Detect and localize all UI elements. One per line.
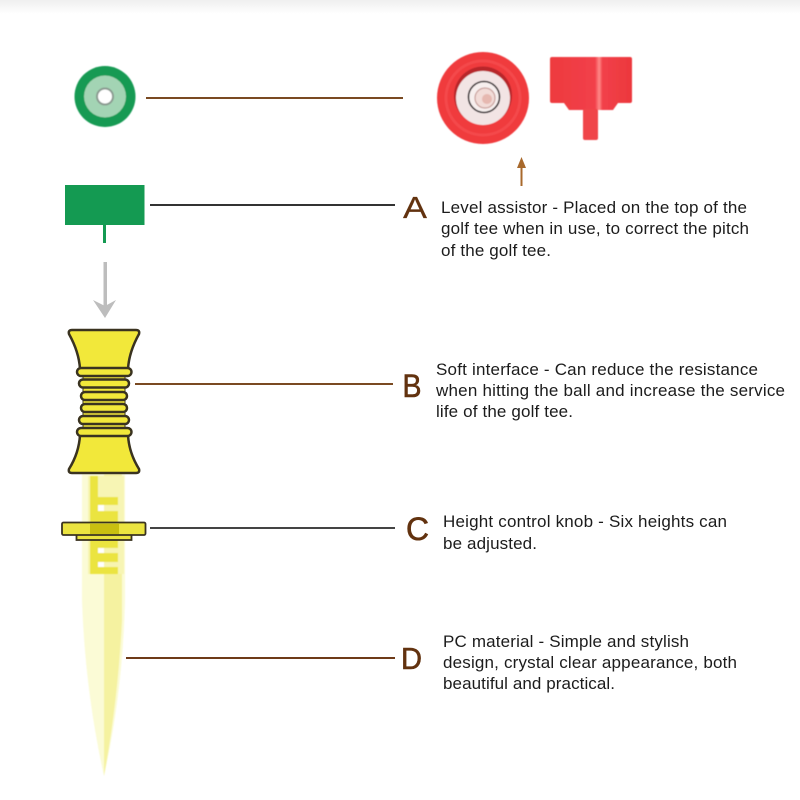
text block D: beautiful and practical.	[443, 674, 615, 693]
letter B: B	[402, 368, 422, 404]
text block C: be adjusted.	[443, 534, 537, 553]
letter A: A	[403, 190, 427, 225]
text block A	[441, 198, 749, 260]
text block B	[435, 360, 785, 421]
icon: red level top view	[437, 52, 529, 144]
connector line D	[126, 657, 395, 659]
height control knob	[62, 522, 146, 540]
text block B: when hitting the ball and increase the service	[435, 381, 785, 400]
illustration: golf tee	[62, 330, 146, 776]
connector line B	[135, 383, 393, 385]
text block A: of the golf tee.	[441, 241, 551, 260]
soft interface	[69, 330, 139, 473]
icon: red level side view	[550, 57, 632, 140]
text block D: design, crystal clear appearance, both	[443, 653, 737, 672]
icon: green level assistor top view	[74, 66, 136, 127]
text block D	[443, 632, 737, 693]
connector line C	[150, 527, 395, 529]
icon: green level assistor side view	[65, 185, 144, 243]
text block B: Soft interface - Can reduce the resistance	[436, 360, 758, 379]
text block D: PC material - Simple and stylish	[443, 632, 689, 651]
text block B: life of the golf tee.	[436, 402, 573, 421]
arrow: grey down	[93, 262, 116, 318]
connector line: green top view to red level	[146, 97, 403, 99]
connector line A	[150, 204, 395, 206]
tee height notch column	[88, 476, 124, 574]
text block C	[443, 512, 727, 553]
letter D: D	[401, 641, 422, 676]
tee clear body	[82, 474, 125, 776]
text block A: Level assistor - Placed on the top of the	[441, 198, 747, 217]
text block C: Height control knob - Six heights can	[443, 512, 727, 531]
arrow: up to red level	[517, 157, 526, 186]
letter C: C	[406, 511, 429, 547]
text block A: golf tee when in use, to correct the pitch	[441, 219, 749, 238]
